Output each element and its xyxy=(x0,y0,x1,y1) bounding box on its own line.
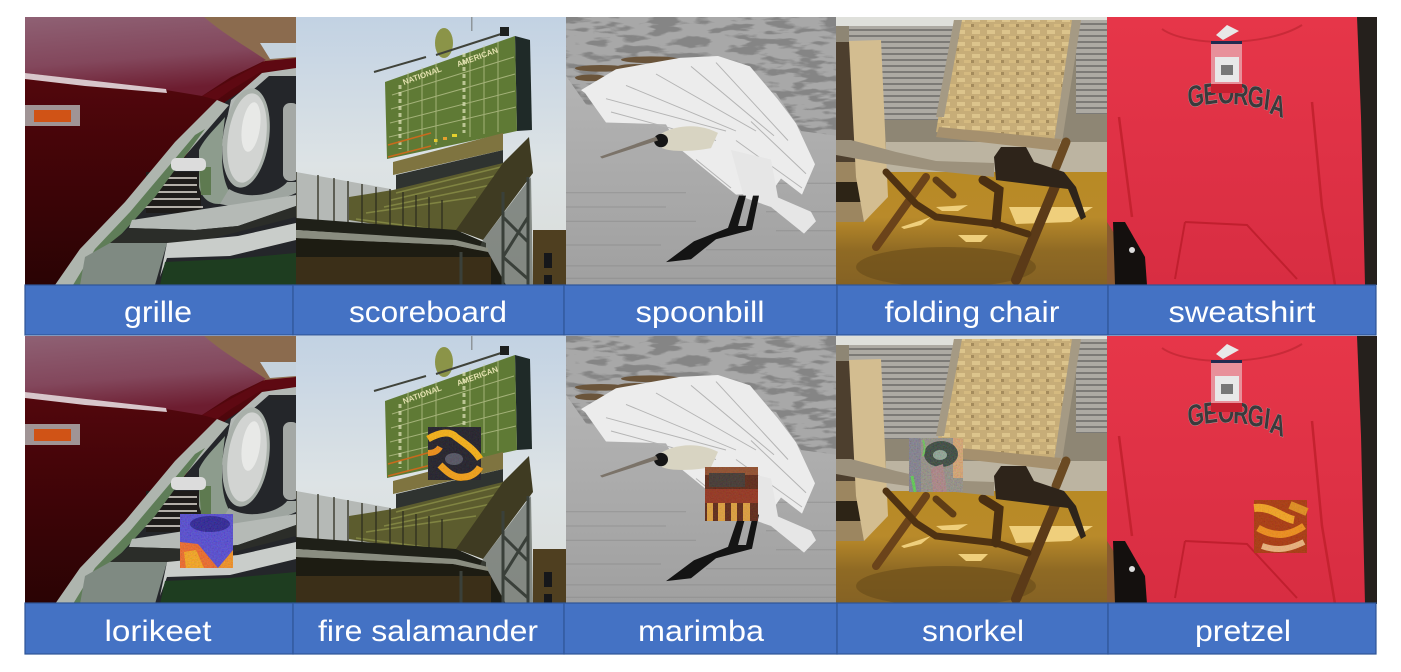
patch: marimba xyxy=(705,467,758,521)
photo: car with lorikeet patch xyxy=(25,336,299,604)
photo: scoreboard: AMERICAN xyxy=(456,46,499,69)
label: fire salamander: fire salamander xyxy=(318,615,538,648)
photo: sweatshirt with pretzel patch xyxy=(1107,336,1377,606)
label: pretzel xyxy=(1108,603,1376,654)
label: marimba: marimba xyxy=(638,615,764,648)
photo: scoreboard with fire salamander patch: NATIONAL xyxy=(402,383,443,406)
label: pretzel: pretzel xyxy=(1195,615,1291,648)
photo: sweatshirt: GEORGIA xyxy=(1186,77,1288,125)
label: snorkel xyxy=(837,603,1108,654)
patch: pretzel xyxy=(1254,500,1307,553)
label: spoonbill: spoonbill xyxy=(636,296,764,329)
label: grille xyxy=(25,285,293,335)
label: grille: grille xyxy=(124,296,192,329)
photo: spoonbill xyxy=(566,17,837,286)
photo: scoreboard: NATIONAL xyxy=(402,64,443,87)
label: scoreboard: scoreboard xyxy=(349,296,507,329)
label: folding chair: folding chair xyxy=(884,296,1060,329)
panel: original images row xyxy=(25,17,1377,287)
panel: patched images row xyxy=(25,336,1377,606)
label: spoonbill xyxy=(564,285,837,335)
photo: sweatshirt xyxy=(1107,17,1377,287)
patch: fire salamander xyxy=(428,427,481,480)
label: lorikeet xyxy=(25,603,293,654)
photo: scoreboard with fire salamander patch: AMERICAN xyxy=(456,365,499,388)
label: scoreboard xyxy=(293,285,564,335)
photo: car xyxy=(25,17,299,285)
photo: sweatshirt with pretzel patch: GEORGIA xyxy=(1186,396,1288,444)
patch: lorikeet xyxy=(180,514,233,568)
photo: scoreboard with fire salamander patch xyxy=(296,336,567,604)
photo: spoonbill with marimba patch xyxy=(566,336,837,605)
label: fire salamander xyxy=(293,603,564,654)
photo: folding chair with snorkel patch xyxy=(836,336,1107,606)
photo: folding chair xyxy=(836,17,1107,287)
panel: patched labels row xyxy=(25,603,1376,654)
photo: scoreboard xyxy=(296,17,567,285)
label: sweatshirt xyxy=(1108,285,1376,335)
panel: original labels row xyxy=(25,285,1376,335)
label: folding chair xyxy=(837,285,1108,335)
patch: snorkel xyxy=(909,438,963,492)
label: lorikeet: lorikeet xyxy=(104,615,212,648)
label: sweatshirt: sweatshirt xyxy=(1168,296,1316,329)
label: marimba xyxy=(564,603,837,654)
label: snorkel: snorkel xyxy=(922,615,1024,648)
